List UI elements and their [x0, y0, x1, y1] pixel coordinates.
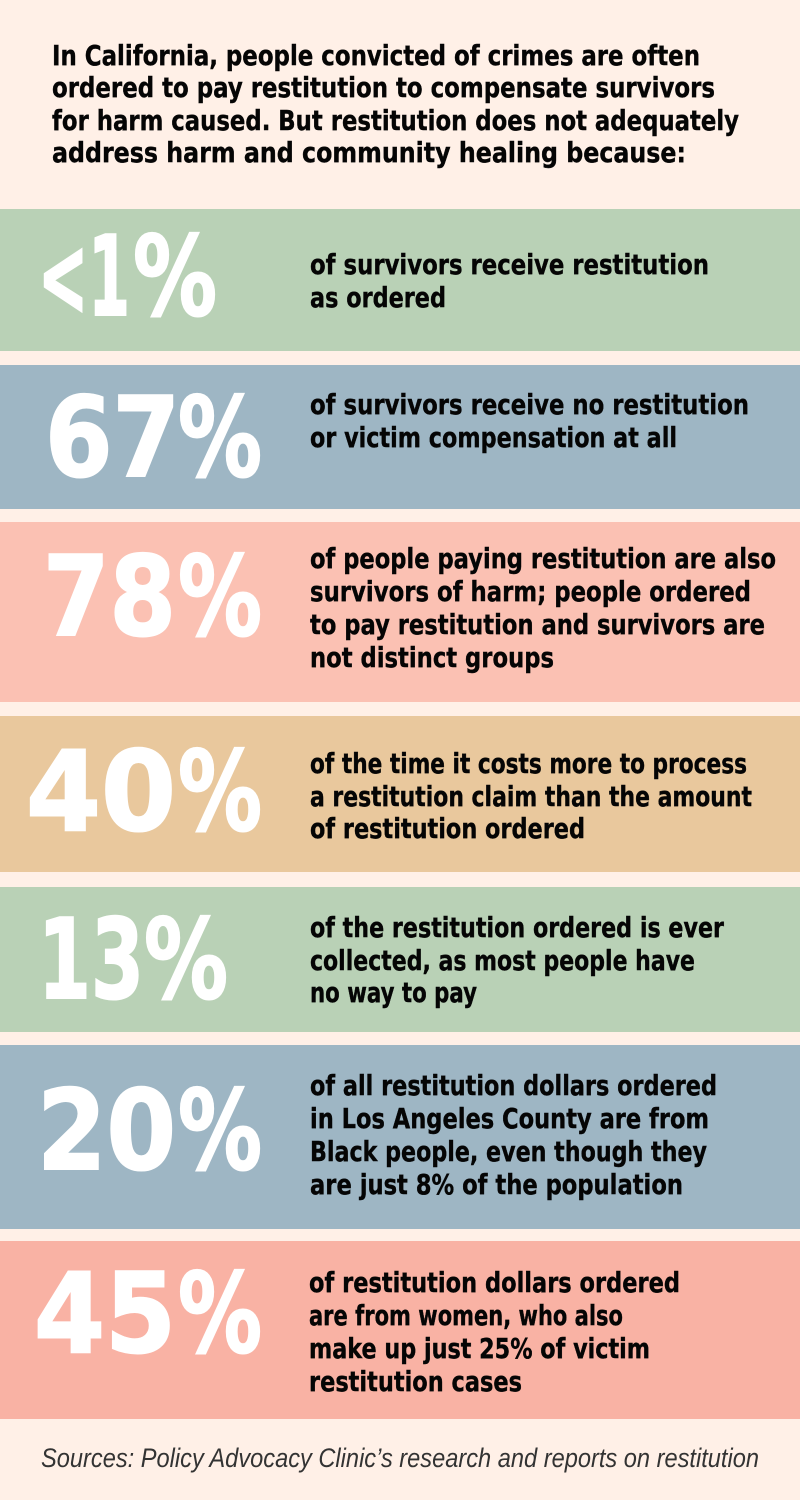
description: 45%: are from women, who also	[309, 1299, 623, 1332]
panel: 13 percent	[0, 887, 800, 1032]
description: 13%: collected, as most people have	[310, 944, 695, 977]
statistic: 20%: 20	[37, 1067, 176, 1196]
description: 45%: of restitution dollars ordered	[309, 1266, 680, 1299]
statistic: 45%: 45	[34, 1250, 176, 1379]
panel: 78 percent	[0, 522, 800, 702]
description: 20%: Black people, even though they	[310, 1135, 707, 1168]
description: 45%: restitution cases	[309, 1365, 522, 1398]
heading: intro text	[52, 39, 739, 169]
statistic: 67%: 67	[45, 374, 180, 503]
statistic: <1%: <1	[38, 213, 130, 342]
panel: 67 percent	[0, 365, 800, 509]
statistic: 40%: %	[178, 728, 262, 857]
panel: 40 percent	[0, 716, 800, 872]
statistic: 45%: %	[178, 1250, 262, 1379]
description: 78%: not distinct groups	[310, 641, 554, 674]
statistic: 40%	[26, 728, 262, 857]
description: 20%	[310, 1069, 717, 1201]
description: 40%: of restitution ordered	[310, 812, 585, 845]
description: 20%: are just 8% of the population	[310, 1168, 683, 1201]
statistic: <1%: %	[133, 213, 217, 342]
description: <1%	[310, 248, 709, 314]
panel: 45 percent	[0, 1241, 800, 1419]
description: <1%: as ordered	[310, 281, 446, 314]
description: 45%: make up just 25% of victim	[309, 1332, 650, 1365]
description: 67%	[310, 388, 749, 454]
description: 45%	[309, 1266, 680, 1398]
description: 20%: in Los Angeles County are from	[310, 1102, 709, 1135]
heading: intro text: address harm and community healing because:	[52, 136, 686, 169]
description: 40%	[310, 747, 752, 845]
statistic: 13%: 13	[38, 896, 144, 1025]
statistic: 78%: 78	[43, 533, 176, 662]
statistic: 20%	[37, 1067, 262, 1196]
statistic: 13%: %	[144, 896, 228, 1025]
description: 13%: no way to pay	[310, 976, 477, 1009]
description: 78%	[310, 542, 776, 674]
description: 67%: or victim compensation at all	[310, 421, 677, 454]
description: <1%: of survivors receive restitution	[310, 248, 709, 281]
panel: 20 percent	[0, 1045, 800, 1229]
panel: less than 1 percent	[0, 209, 800, 351]
description: 13%	[310, 911, 724, 1009]
statistic: 67%: %	[178, 374, 262, 503]
statistic: 45%	[34, 1250, 262, 1379]
statistic: 20%: %	[178, 1067, 262, 1196]
statistic: 78%: %	[178, 533, 262, 662]
statistic: 40%: 40	[26, 728, 176, 857]
